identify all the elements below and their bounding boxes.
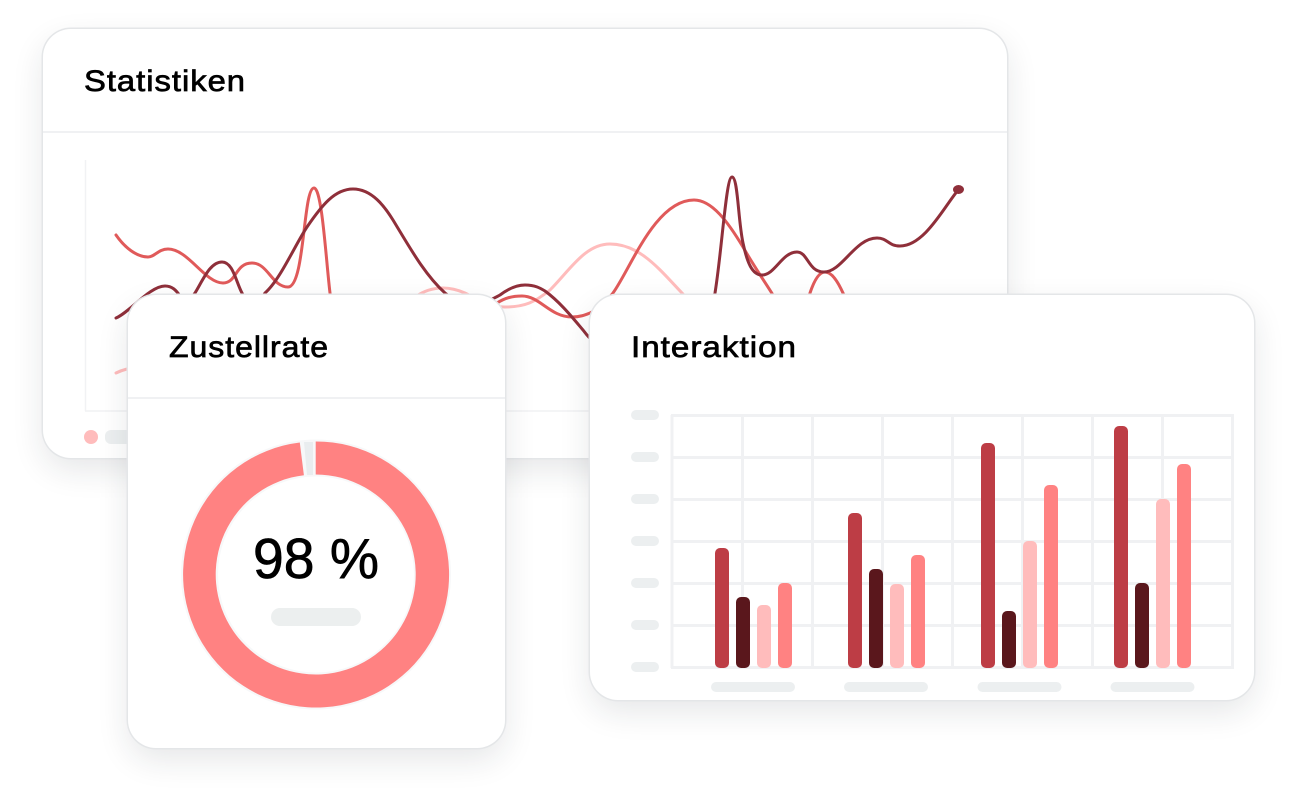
panel: Zustellrate donut card <box>128 295 505 748</box>
heading: Interaktion: Interaktion <box>631 331 797 364</box>
legend <box>84 430 165 444</box>
placeholder label <box>271 608 361 626</box>
y axis placeholder labels <box>631 410 659 672</box>
line: dark red series <box>116 177 959 364</box>
heading: Zustellrate: Zustellrate <box>169 331 329 364</box>
value: 98 %: 98 % <box>253 527 379 591</box>
line end marker <box>953 185 964 194</box>
bar group 2 <box>848 513 925 668</box>
heading: Statistiken: Statistiken <box>84 65 246 98</box>
donut chart: 98 percent <box>183 441 449 707</box>
panel: Statistiken line chart card <box>43 29 1007 458</box>
bar group 4 <box>1114 426 1191 668</box>
bar group 3 <box>981 443 1058 668</box>
bar group 1 <box>715 548 792 668</box>
line chart: three trend lines <box>116 177 964 373</box>
line: red series <box>116 188 870 330</box>
line: pink series <box>116 244 740 373</box>
panel: Interaktion bar chart card <box>590 295 1254 700</box>
x axis placeholder labels <box>711 682 1194 692</box>
